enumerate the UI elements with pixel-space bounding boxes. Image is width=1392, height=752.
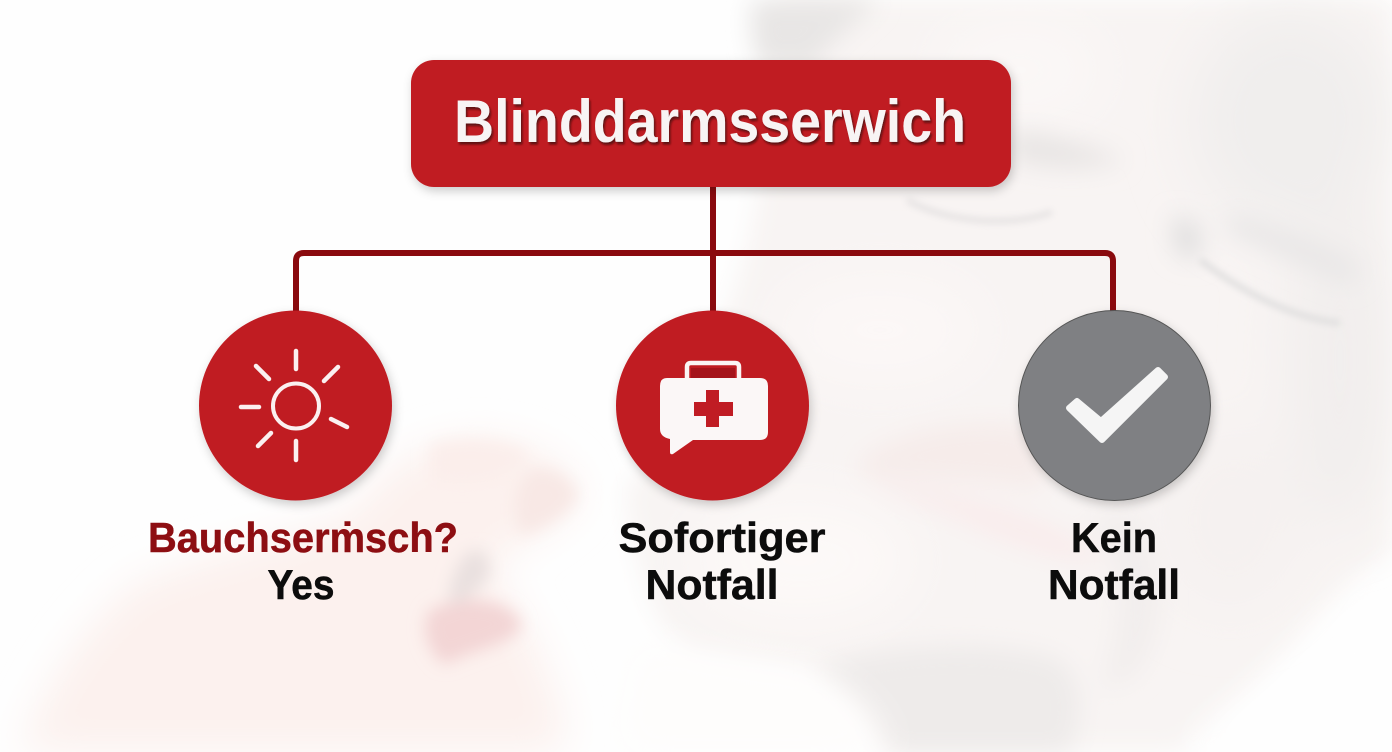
face skin bbox=[625, 0, 1392, 752]
fist bbox=[20, 440, 580, 752]
icon: first aid kit speech bubble bbox=[660, 363, 768, 454]
label: Sofortiger Notfall: Sofortiger bbox=[618, 514, 826, 561]
label: Kein Notfall bbox=[1048, 514, 1180, 608]
towel bbox=[620, 570, 1392, 752]
icon: check mark bbox=[1069, 370, 1165, 440]
icon: sun bbox=[241, 351, 347, 460]
title text: Blinddarmsserwich bbox=[454, 88, 966, 155]
label: Bauchsermisch? Yes bbox=[148, 514, 458, 608]
label: Bauchsermisch? Yes: Yes bbox=[268, 561, 334, 608]
label: Sofortiger Notfall bbox=[618, 514, 826, 608]
label: Sofortiger Notfall: Notfall bbox=[646, 561, 778, 608]
label: Kein Notfall: Notfall bbox=[1048, 561, 1180, 608]
hair, brows, eyes, lips, stubble bbox=[750, 0, 1362, 752]
label: Bauchsermisch? Yes: Bauchserṁsch? bbox=[148, 514, 458, 561]
label: Kein Notfall: Kein bbox=[1071, 514, 1157, 561]
